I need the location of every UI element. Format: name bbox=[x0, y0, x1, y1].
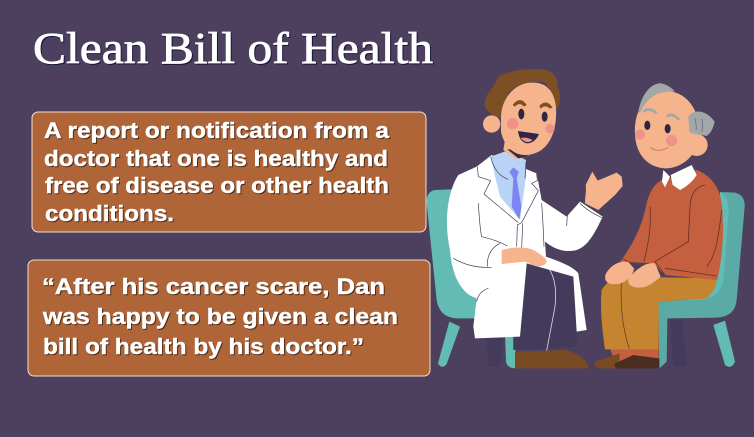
panel: definition: conditions. bbox=[45, 201, 174, 226]
illustration: doctor and patient bbox=[427, 69, 745, 369]
icon: doctor figure bbox=[447, 69, 623, 368]
panel: example sentence: “After his cancer scare, Dan bbox=[42, 274, 385, 299]
panel: definition: free of disease or other health bbox=[45, 173, 389, 198]
panel: definition: A report or notification from a bbox=[44, 118, 390, 143]
title: Clean Bill of Health bbox=[33, 24, 433, 73]
panel: example sentence bbox=[28, 260, 430, 376]
panel: example sentence: bill of health by his doctor.” bbox=[43, 334, 364, 359]
panel: definition: doctor that one is healthy and bbox=[44, 146, 388, 171]
panel: example sentence: was happy to be given a clean bbox=[42, 304, 398, 329]
panel: definition bbox=[32, 112, 426, 232]
icon: patient chair bbox=[658, 192, 745, 368]
icon: patient figure bbox=[595, 83, 723, 369]
icon: doctor chair bbox=[427, 189, 520, 368]
